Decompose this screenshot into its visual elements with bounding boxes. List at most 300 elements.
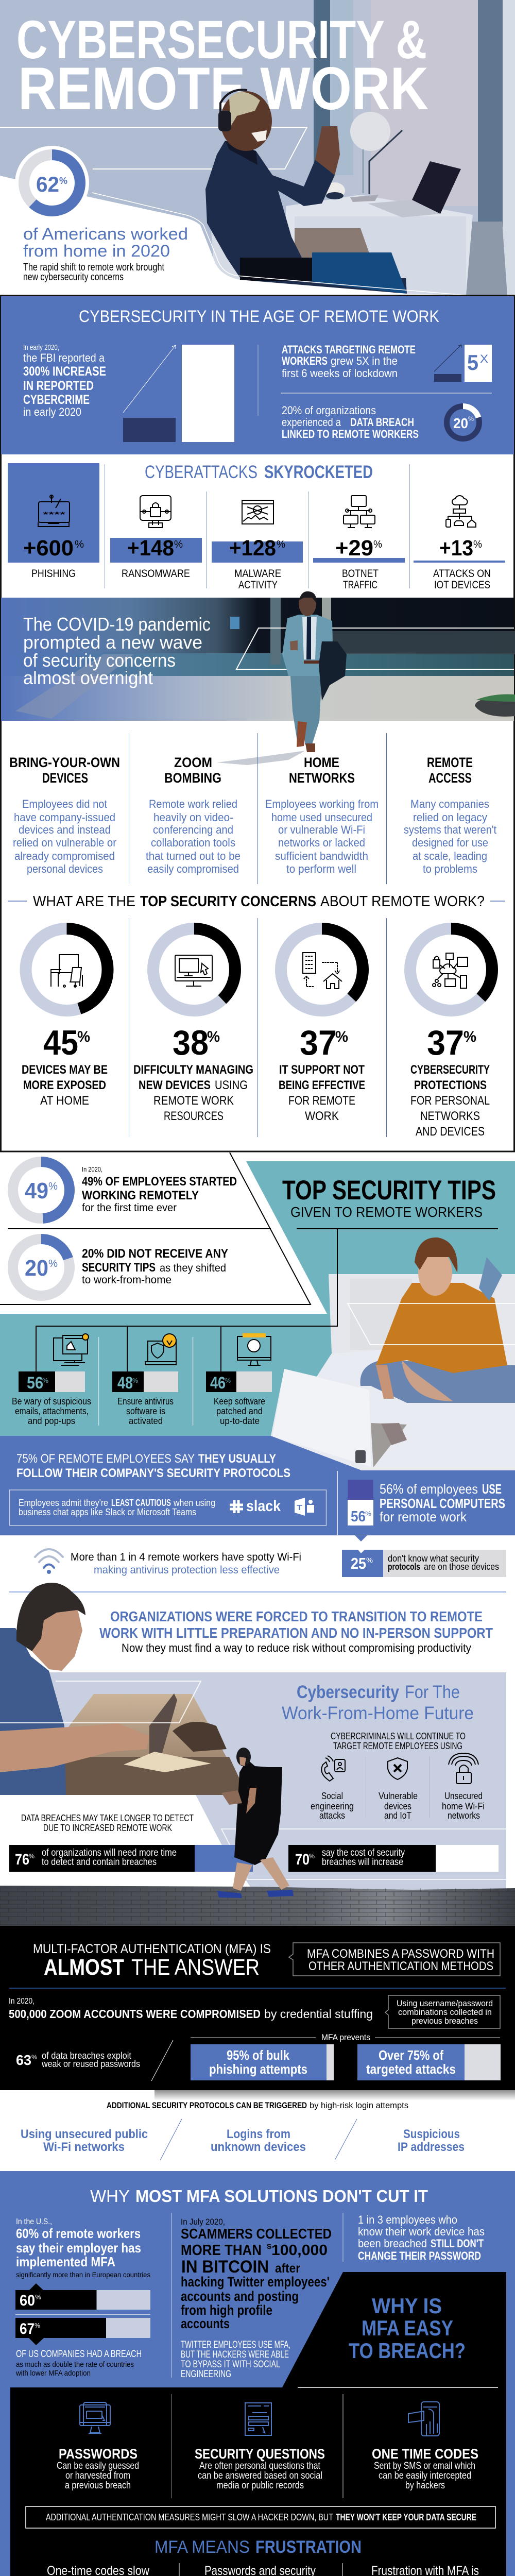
heading: SKYROCKETED — [264, 462, 373, 482]
column: home networks: HOME — [304, 755, 339, 770]
panel: covid photo band — [1, 591, 515, 765]
bar: bulk phishing: 95% of bulk — [227, 2047, 289, 2063]
stat: 63% — [16, 2050, 140, 2069]
icon: wi-fi — [35, 1549, 63, 1573]
accent line — [92, 193, 466, 295]
donut: 37% — [410, 928, 492, 1011]
neon parallelogram outline — [236, 628, 514, 669]
column: home networks: networks or lacked — [278, 836, 365, 849]
donut: 62% — [15, 146, 89, 220]
panel: additional security protocols — [21, 2090, 515, 2160]
stats row: +29 — [335, 536, 373, 561]
attack labels: IOT DEVICES — [434, 579, 490, 591]
spotty wi-fi text: More than 1 in 4 remote workers have spotty Wi-Fi — [71, 1551, 301, 1563]
attack labels: BOTNET — [342, 568, 379, 580]
column: zoom bombing: Remote work relied — [149, 798, 237, 810]
column: twitter scam: $ — [267, 2242, 271, 2250]
tips text: up-to-date — [220, 1416, 260, 1426]
attacks targeting remote workers text: WORKERS — [282, 354, 328, 367]
column: zoom bombing: easily compromised — [147, 862, 239, 875]
risk triggers: Logins from — [227, 2127, 290, 2141]
columns: MFA weaknesses — [57, 2446, 478, 2491]
column: remote access: ACCESS — [428, 770, 472, 786]
bar: 56% personal computers: 56 — [351, 1509, 366, 1525]
column: passwords: Can be easily guessed — [57, 2461, 139, 2471]
attacks targeting remote workers text — [282, 343, 416, 380]
attack vectors labels: devices — [384, 1801, 411, 1811]
donut: 62%: % — [59, 176, 67, 186]
bars — [8, 463, 505, 563]
subheading: ADDITIONAL SECURITY PROTOCOLS CAN BE TRIGGERED — [107, 2100, 307, 2110]
column: home networks: sufficient bandwidth — [275, 850, 368, 862]
column: security questions: Are often personal questions that — [199, 2461, 321, 2471]
bar: 67%: 67 — [20, 2320, 35, 2337]
concern labels: PROTECTIONS — [414, 1078, 487, 1092]
donut: 37% — [281, 928, 363, 1011]
panel: organizations forced to transition — [99, 1608, 493, 1654]
hero statement: of Americans worked — [23, 225, 188, 243]
heading: why is MFA easy to breach: MFA EASY — [362, 2316, 453, 2340]
COVID statement — [23, 614, 211, 688]
stats row: +13 — [439, 536, 473, 561]
column: bring-your-own devices: Employees did not — [22, 798, 107, 810]
title: REMOTE WORK — [18, 55, 428, 122]
donut: 20%: % — [468, 415, 474, 422]
icon: security question form — [245, 2403, 271, 2435]
stat: 25%: 25 — [351, 1554, 366, 1572]
risk triggers: Wi-Fi networks — [43, 2140, 125, 2154]
column: security questions: SECURITY QUESTIONS — [195, 2446, 325, 2462]
icon: slack logo — [230, 1498, 281, 1515]
column: MFA adoption: 60% of remote workers — [16, 2226, 141, 2241]
column: home networks: or vulnerable Wi-Fi — [278, 823, 365, 836]
donut: 38% — [153, 928, 235, 1011]
column: MFA adoption: with lower MFA adoption — [15, 2369, 91, 2378]
heading: why is MFA easy to breach — [349, 2294, 466, 2363]
attack vectors labels — [311, 1791, 485, 1821]
column: remote access: Many companies — [410, 798, 489, 810]
panel: cyberattacks skyrocketed — [8, 462, 505, 591]
concern labels: MORE EXPOSED — [23, 1078, 106, 1092]
risk triggers: Suspicious — [403, 2127, 460, 2141]
callout: additional authentication: ADDITIONAL AUTHENTICATION MEASURES MIGHT SLOW A HACKER DOWN, BUT — [46, 2512, 333, 2522]
concern labels: WORK — [305, 1109, 339, 1123]
percent values: % — [464, 1028, 476, 1045]
heading: why is MFA easy to breach: TO BREACH? — [349, 2338, 466, 2363]
concern labels: REMOTE WORK — [153, 1094, 234, 1108]
connector lines — [0, 1153, 311, 1304]
FBI statistic text — [23, 343, 106, 418]
callout: credential stuffing: Using username/password — [397, 1998, 493, 2008]
column: zoom bombing: ZOOM — [174, 755, 212, 770]
frame around upper sections — [1, 296, 514, 1151]
heading: ABOUT REMOTE WORK? — [320, 893, 485, 910]
hero statement: new cybersecurity concerns — [23, 272, 124, 283]
icon: one time code phone — [408, 2402, 439, 2436]
chat apps callout: Employees admit they're — [19, 1498, 108, 1508]
column: twitter scam: hacking Twitter employees' — [181, 2274, 330, 2290]
icon: phishing laptop with hook — [38, 495, 70, 527]
concern labels: CYBERSECURITY — [410, 1063, 490, 1077]
bar: 67% — [15, 2318, 150, 2345]
column: zoom bombing: conferencing and — [153, 823, 233, 836]
tips text: patched and — [216, 1406, 263, 1416]
walking man with backpack — [217, 1748, 294, 1898]
zoom accounts statement: In 2020, — [9, 1997, 35, 2006]
parking building detail — [15, 598, 515, 719]
panel: top security concerns — [8, 893, 505, 1139]
attack vectors labels: networks — [448, 1810, 480, 1821]
bar: 56% — [19, 1371, 85, 1392]
COVID statement: prompted a new wave — [23, 632, 202, 653]
column: remote access: designed for use — [412, 836, 488, 849]
detection statement: DUE TO INCREASED REMOTE WORK — [43, 1823, 172, 1833]
column: remote access: REMOTE — [427, 755, 473, 770]
bar chart: 300% increase — [123, 345, 234, 442]
spotty wi-fi text: making antivirus protection less effective — [94, 1564, 280, 1576]
panel: security protocols blue — [0, 1436, 515, 1541]
attack labels: TRAFFIC — [343, 579, 377, 591]
bar: targeted attacks — [357, 2044, 501, 2080]
heading: MFA means frustration — [154, 2537, 362, 2557]
callout: additional authentication: THEY WON'T KEEP YOUR DATA SECURE — [336, 2512, 476, 2522]
column: zoom bombing — [146, 755, 241, 875]
text: 20% did not receive tips: SECURITY TIPS — [82, 1261, 156, 1275]
column: bring-your-own devices: already compromised — [14, 850, 115, 862]
attack vectors labels: home Wi-Fi — [442, 1801, 485, 1811]
percent values: 37 — [427, 1023, 464, 1062]
tips text: Be wary of suspicious — [12, 1396, 91, 1406]
tips text: and pop-ups — [28, 1416, 75, 1426]
concern labels: FOR REMOTE — [288, 1094, 355, 1108]
donut: 20%: 20 — [25, 1256, 48, 1281]
column: bring-your-own devices: have company-issued — [14, 811, 115, 824]
FBI statistic text: in early 2020 — [23, 405, 81, 418]
column: passwords: PASSWORDS — [59, 2446, 138, 2462]
column: home networks: Employees working from — [265, 798, 379, 810]
callout: MFA combines: MFA COMBINES A PASSWORD WITH — [307, 1947, 494, 1961]
heading: top security tips — [282, 1175, 496, 1220]
column: one time codes: by hackers — [405, 2480, 445, 2491]
attack vectors labels: and IoT — [384, 1810, 411, 1821]
column: MFA adoption: as much as double the rate of countries — [16, 2360, 134, 2369]
heading: ALMOST — [44, 1955, 124, 1980]
column: twitter scam: TWITTER EMPLOYEES USE MFA, — [181, 2340, 290, 2350]
bar: 60%: 60 — [20, 2292, 35, 2309]
concern labels: AND DEVICES — [416, 1125, 485, 1139]
neon parallelogram outline — [221, 1829, 506, 1879]
heading: Work-From-Home Future — [282, 1703, 474, 1723]
column: twitter scam: ENGINEERING — [181, 2369, 231, 2380]
pointer arrow — [355, 1535, 367, 1541]
column: security questions — [195, 2446, 325, 2491]
neon parallelogram outline — [0, 127, 307, 169]
FBI statistic text: the FBI reported a — [23, 351, 105, 364]
FBI statistic text: CYBERCRIME — [23, 393, 90, 407]
bar: 70%: 70 — [295, 1851, 310, 1868]
concern labels: NEW DEVICES — [139, 1078, 211, 1092]
column: passwords — [57, 2446, 139, 2491]
icon: software update monitor — [237, 1333, 271, 1365]
text: 49% of employees: WORKING REMOTELY — [82, 1189, 199, 1202]
column: twitter scam: from high profile — [181, 2302, 272, 2318]
donut: 20%: 20 — [453, 415, 468, 431]
column: home networks: NETWORKS — [289, 770, 355, 786]
neon parallelogram outline — [0, 1681, 201, 1723]
frustration columns — [39, 2564, 487, 2576]
attacks targeting remote workers text: ATTACKS TARGETING REMOTE — [282, 343, 416, 356]
icon: antivirus laptop — [145, 1334, 176, 1365]
column: remote access: systems that weren't — [404, 823, 496, 836]
heading: MOST MFA SOLUTIONS DON'T CUT IT — [135, 2187, 428, 2206]
75% statement: THEY USUALLY — [198, 1452, 276, 1466]
heading: top security tips: GIVEN TO REMOTE WORKERS — [290, 1204, 483, 1220]
column: twitter scam: 100,000 — [271, 2242, 328, 2259]
panel: four security concern columns — [9, 733, 496, 884]
percent values: % — [77, 1028, 90, 1045]
column: MFA adoption: say their employer has — [16, 2240, 141, 2256]
bar: 56% personal computers: % — [365, 1510, 371, 1517]
attack labels: PHISHING — [31, 568, 76, 580]
attack vectors labels: Unsecured — [444, 1791, 483, 1801]
bar: 70%: breaches will increase — [322, 1857, 403, 1868]
subheading: CYBERCRIMINALS WILL CONTINUE TO — [331, 1731, 466, 1741]
bar: 56%: % — [42, 1377, 48, 1384]
title — [16, 10, 428, 122]
text: 20% did not receive tips: 20% DID NOT RECEIVE ANY — [82, 1247, 228, 1261]
hero statement — [23, 225, 188, 283]
column: bring-your-own devices: relied on vulnerable or — [13, 836, 116, 849]
text: 49% of employees: for the first time ever — [82, 1202, 177, 1214]
heading: For The — [405, 1682, 460, 1702]
concern labels: DIFFICULTY MANAGING — [133, 1063, 253, 1077]
column: twitter scam: after — [275, 2261, 300, 2276]
bar: 70% — [288, 1845, 499, 1872]
stats row — [23, 536, 482, 561]
stat: 63%: weak or reused passwords — [41, 2059, 140, 2069]
tips text: emails, attachments, — [15, 1406, 89, 1416]
detection statement: DATA BREACHES MAY TAKE LONGER TO DETECT — [21, 1813, 194, 1823]
concern labels: NETWORKS — [420, 1109, 480, 1123]
75% statement — [16, 1452, 290, 1480]
heading: WHAT ARE THE — [33, 893, 135, 910]
text: 49% of employees — [82, 1165, 237, 1214]
column: breached employees: 1 in 3 employees who — [358, 2213, 457, 2226]
column: remote access: relied on legacy — [413, 811, 487, 824]
donut: 49%: % — [48, 1181, 58, 1192]
column: MFA adoption: significantly more than in European countries — [16, 2270, 150, 2279]
column: home networks: home used unsecured — [271, 811, 372, 824]
concern labels: IT SUPPORT NOT — [279, 1063, 365, 1077]
text: 20% did not receive tips: as they shifted — [160, 1262, 226, 1274]
risk triggers: IP addresses — [398, 2140, 465, 2154]
stat: 25%: are on those devices — [424, 1562, 499, 1572]
tips tree connector — [36, 1229, 498, 1371]
bar: 76%: to detect and contain breaches — [42, 1857, 157, 1868]
neon parallelogram outline — [348, 1303, 515, 1345]
hero statement: from home in 2020 — [23, 242, 170, 260]
tips text: Ensure antivirus — [117, 1396, 174, 1406]
attack vectors labels: Social — [321, 1791, 343, 1801]
stat: 63%: of data breaches exploit — [42, 2050, 131, 2061]
stats row: % — [373, 539, 382, 550]
column: breached employees: CHANGE THEIR PASSWORD — [358, 2249, 481, 2262]
column: MFA adoption — [15, 2217, 150, 2378]
icon: microsoft teams logo — [295, 1498, 314, 1516]
panel: organizations forced to transition: Now they must find a way to reduce risk without compromising productivity — [122, 1641, 471, 1654]
detection statement — [21, 1813, 194, 1833]
bar: 48% — [112, 1371, 178, 1392]
bar: 46%: % — [225, 1377, 231, 1384]
column: breached employees: STILL DON'T — [431, 2237, 484, 2250]
heading — [145, 462, 373, 482]
donut: 49% — [13, 1162, 70, 1218]
icon: social engineering phone — [321, 1756, 345, 1781]
photo: desk with tablet — [49, 1693, 247, 1795]
attacks targeting remote workers text: first 6 weeks of lockdown — [282, 367, 398, 380]
column: zoom bombing: collaboration tools — [151, 836, 235, 849]
stats row: +128 — [229, 536, 276, 561]
text: 49% of employees: 49% OF EMPLOYEES STARTED — [82, 1175, 237, 1189]
attack labels — [31, 568, 491, 591]
callout: additional authentication — [26, 2506, 495, 2528]
callout: credential stuffing: previous breaches — [411, 2016, 478, 2026]
stats row: % — [473, 539, 482, 550]
man using tablet — [0, 1583, 149, 1795]
spotty wi-fi text — [71, 1551, 301, 1576]
icon: monitor with cursor — [175, 955, 212, 986]
data breach text: LINKED TO REMOTE WORKERS — [282, 428, 419, 440]
column: twitter scam — [181, 2217, 332, 2380]
stats row: +148 — [127, 536, 174, 561]
heading: THE ANSWER — [131, 1955, 260, 1980]
FBI statistic text: 300% INCREASE — [23, 364, 106, 379]
data breach text: 20% of organizations — [282, 404, 376, 417]
white lower left cut — [0, 176, 466, 295]
bar: 70%: % — [309, 1852, 315, 1860]
text: 20% did not receive tips — [82, 1247, 228, 1286]
column: breached employees — [358, 2213, 485, 2262]
heading: TOP SECURITY CONCERNS — [140, 893, 316, 910]
stats row: % — [174, 539, 183, 550]
heading: WHY — [90, 2187, 130, 2206]
attack labels: ATTACKS ON — [433, 568, 491, 580]
bar: 60% — [15, 2283, 150, 2310]
stat: 25%: don't know what security — [388, 1553, 479, 1564]
panel: work from home future — [0, 1583, 506, 1890]
attacks targeting remote workers text: grew 5X in the — [331, 354, 398, 367]
icon: home desk — [51, 955, 82, 987]
desk with lamp and laptop — [286, 112, 473, 295]
chat apps callout: when using — [173, 1498, 215, 1508]
column: twitter scam: accounts and posting — [181, 2289, 299, 2304]
chat apps callout — [9, 1490, 327, 1526]
concern labels: USING — [215, 1078, 248, 1092]
icon: botnet network — [344, 496, 375, 528]
percent values: 38 — [173, 1023, 209, 1062]
window and curtains photo backdrop — [314, 0, 515, 295]
column: bring-your-own devices: DEVICES — [42, 770, 88, 786]
column: twitter scam: MORE THAN — [181, 2242, 262, 2259]
column: MFA adoption: implemented MFA — [16, 2254, 115, 2269]
heading: why is MFA easy to breach: WHY IS — [372, 2294, 442, 2318]
bar: 60%: % — [35, 2293, 41, 2301]
column: bring-your-own devices: personal devices — [27, 862, 103, 875]
data breach text: DATA BREACH — [350, 416, 414, 429]
COVID statement: almost overnight — [23, 667, 153, 688]
bar: 67%: % — [35, 2321, 40, 2329]
bar: targeted attacks: Over 75% of — [379, 2047, 443, 2063]
personal computers statement: USE — [482, 1481, 502, 1497]
column: MFA adoption: OF US COMPANIES HAD A BREACH — [16, 2349, 142, 2360]
heading: MULTI-FACTOR AUTHENTICATION (MFA) IS — [33, 1942, 271, 1956]
column: one time codes: Sent by SMS or email which — [374, 2461, 475, 2471]
risk triggers: unknown devices — [211, 2140, 306, 2154]
column: remote access: to problems — [423, 862, 477, 875]
bar: targeted attacks: targeted attacks — [366, 2061, 456, 2077]
bar: 76%: 76 — [15, 1851, 29, 1868]
column: breached employees: know their work device has — [358, 2225, 485, 2238]
icon: IoT cloud network — [446, 496, 476, 527]
percent values: % — [335, 1028, 348, 1045]
column: zoom bombing: that turned out to be — [146, 850, 241, 862]
subheading — [331, 1731, 466, 1751]
stat: 63%: % — [31, 2054, 37, 2061]
tips text: activated — [129, 1416, 163, 1426]
stat: 25%: % — [366, 1556, 373, 1564]
hero statement: The rapid shift to remote work brought — [23, 262, 164, 273]
tips text: Keep software — [214, 1396, 265, 1406]
man with headphones — [205, 90, 407, 295]
icon: cloud with connected devices — [433, 953, 468, 988]
heading — [33, 1942, 271, 1980]
panel: hero — [0, 0, 515, 295]
donut: 45% — [26, 928, 108, 1011]
FBI statistic text: IN REPORTED — [23, 379, 94, 393]
icon: password monitor — [80, 2402, 110, 2433]
bar: 46% — [206, 1371, 272, 1392]
column: bring-your-own devices — [9, 755, 120, 875]
column: security questions: can be answered based on social — [198, 2470, 322, 2481]
zoom accounts statement: by credential stuffing — [264, 2007, 373, 2021]
concern labels — [22, 1063, 490, 1139]
stats row: % — [277, 539, 285, 550]
percent values: 37 — [300, 1023, 337, 1062]
stats row: +600 — [23, 536, 74, 561]
heading — [282, 1682, 474, 1723]
75% statement: FOLLOW THEIR COMPANY'S SECURITY PROTOCOLS — [16, 1466, 290, 1480]
concern labels: BEING EFFECTIVE — [279, 1078, 365, 1092]
column: twitter scam: In July 2020, — [181, 2217, 225, 2227]
bar: bulk phishing: phishing attempts — [209, 2061, 307, 2077]
bar: 46%: 46 — [210, 1374, 226, 1392]
75% statement: 75% OF REMOTE EMPLOYEES SAY — [16, 1452, 195, 1466]
heading: CYBERSECURITY IN THE AGE OF REMOTE WORK — [79, 307, 439, 326]
column: home networks — [265, 755, 379, 875]
column: zoom bombing: heavily on video- — [153, 811, 233, 824]
column: breached employees: been breached — [358, 2237, 427, 2250]
icon: suspicious emails — [54, 1334, 89, 1365]
bar: bulk phishing — [191, 2044, 334, 2080]
icon: phishing laptop with hook: **** — [43, 510, 66, 518]
donut: 62%: 62 — [36, 172, 59, 196]
stat: 25%: protocols — [388, 1562, 420, 1572]
column: twitter scam: TO BYPASS IT WITH SOCIAL — [181, 2359, 280, 2370]
column: bring-your-own devices: BRING-YOUR-OWN — [9, 755, 120, 770]
bar: 70%: say the cost of security — [322, 1848, 405, 1858]
callout: credential stuffing: combinations collected in — [398, 2007, 492, 2017]
column: one time codes: ONE TIME CODES — [372, 2446, 478, 2462]
